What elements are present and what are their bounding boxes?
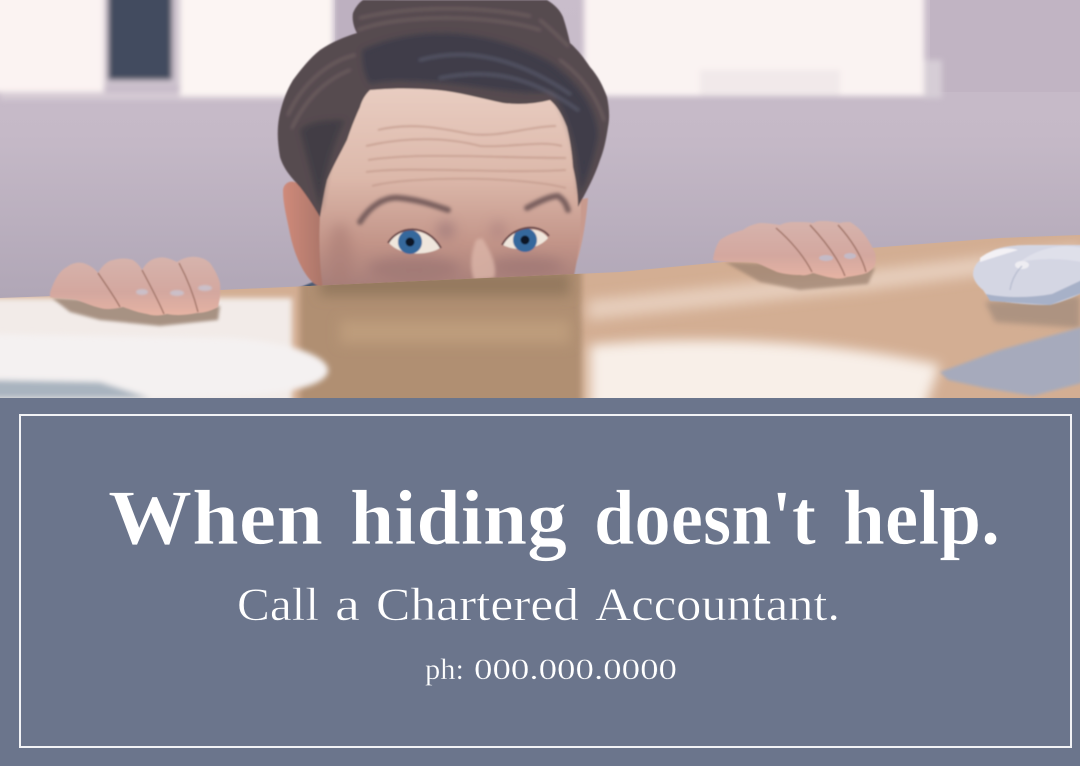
blurred windows [0,0,942,100]
left hand [50,257,220,316]
subheading: Accountant. [595,579,840,631]
wood middle area [300,265,582,405]
phone number: 000.000.0000 [474,653,677,686]
mouse [973,245,1080,305]
headline [108,474,1000,561]
keyboard [0,334,328,398]
eyebrows [360,196,568,222]
phone on desk [940,327,1080,396]
forehead wrinkles [366,126,566,188]
office wall background [0,0,1080,300]
eye left [388,229,441,254]
panel outline frame [20,415,1071,747]
hair highlights [288,9,604,128]
mouse shadow [985,296,1080,328]
desk surface [0,235,1080,398]
subheading: a [335,579,360,631]
subheading: Call [237,579,319,631]
left hand shadow [52,298,220,326]
hair dark core [362,33,598,195]
eye right [502,228,549,252]
shirt collar [300,282,318,286]
photo: man peeking over desk [0,0,1080,420]
subheading [237,579,840,631]
phone number [425,653,677,686]
headline: When [108,474,323,561]
man's head [278,0,609,295]
cheek and eye socket shading [330,218,559,278]
headline: doesn't [594,474,816,561]
face [319,88,580,285]
right hand [713,221,876,279]
hair [278,0,609,217]
left ear [283,182,326,290]
right ear [576,198,588,261]
headline: help. [843,474,1000,561]
nose [471,238,495,280]
phone number: ph: [425,653,464,686]
left glare [0,298,292,408]
text panel background [0,398,1080,766]
subheading: Chartered [376,579,579,631]
right hand shadow [725,262,875,290]
headline: hiding [350,474,567,561]
right glare [588,245,1080,320]
